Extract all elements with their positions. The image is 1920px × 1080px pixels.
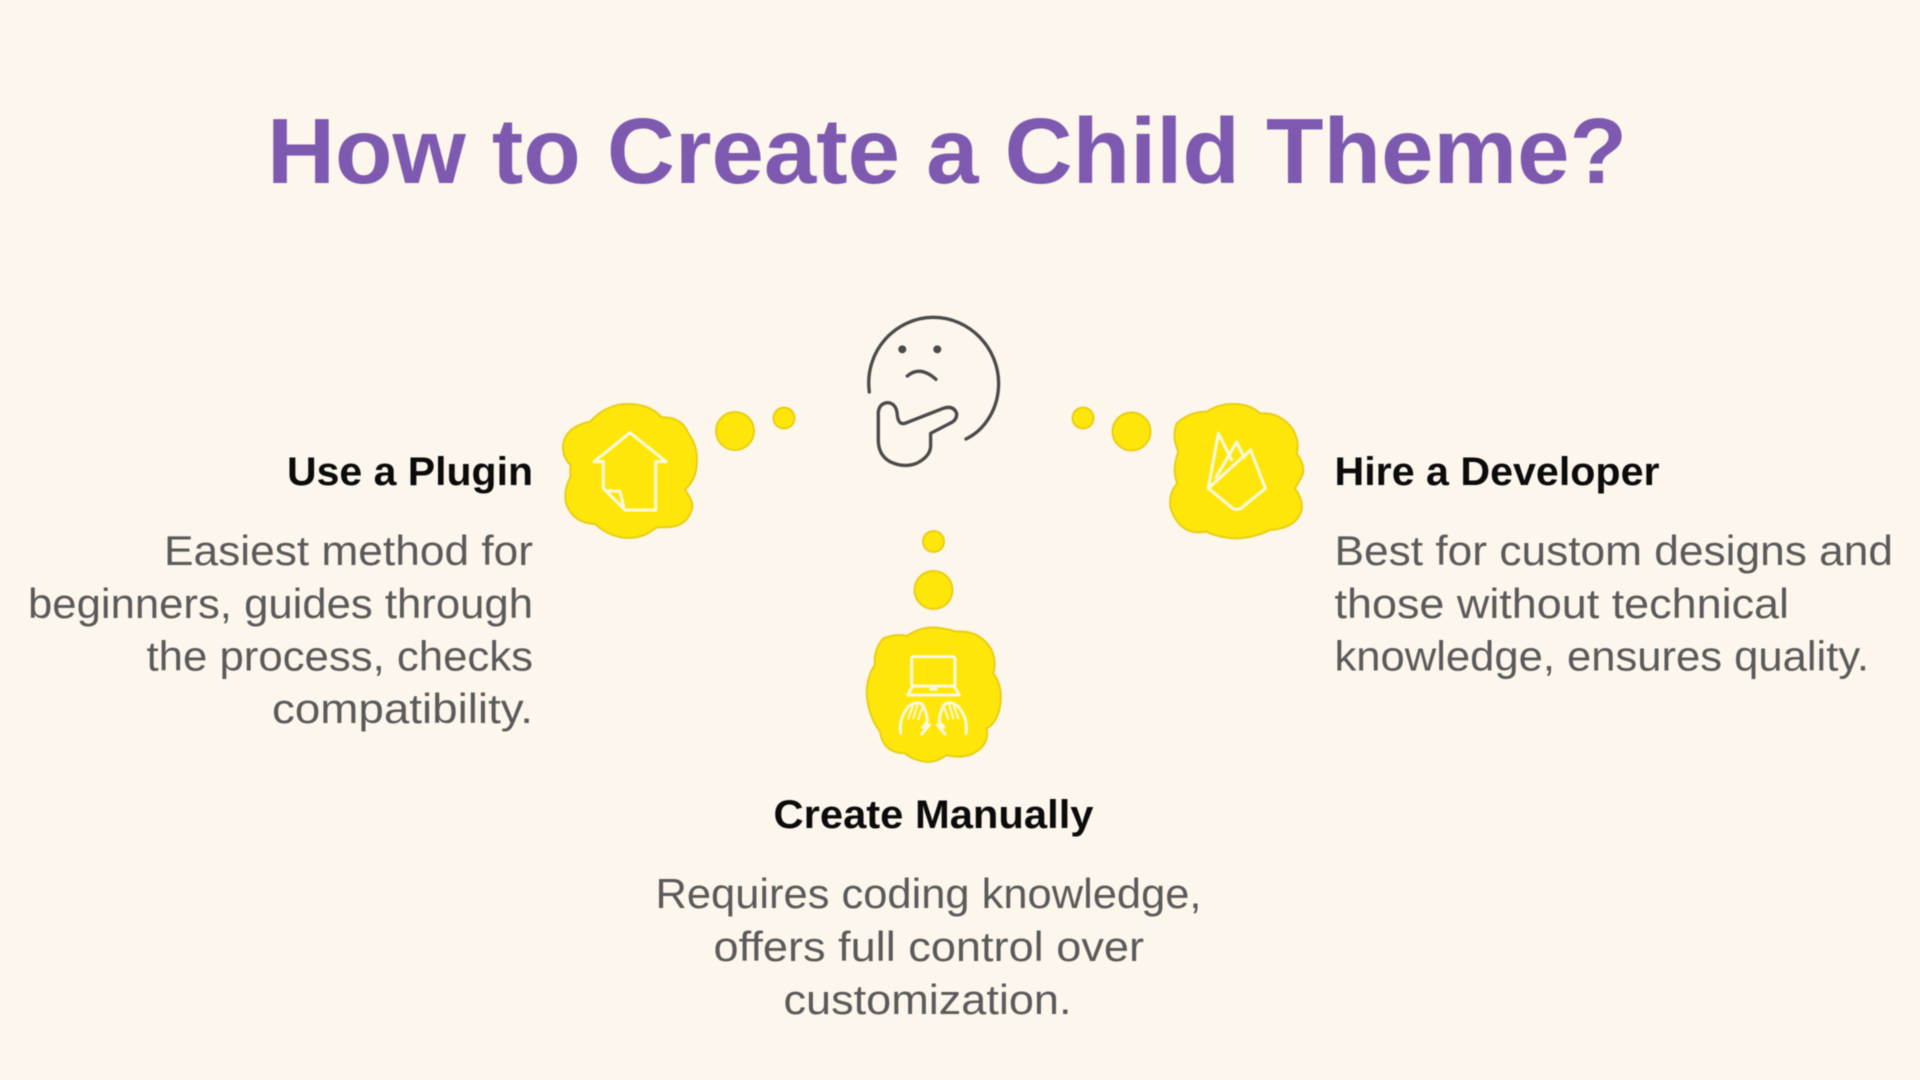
icon: firebase on yellow blob	[1170, 404, 1303, 538]
text: developer description: those without technical	[1334, 580, 1789, 627]
icon: thinking face	[869, 317, 999, 465]
text: plugin description: compatibility.	[272, 685, 533, 732]
text: plugin description: the process, checks	[146, 632, 533, 680]
text: developer description: Best for custom designs and	[1334, 527, 1893, 574]
heading: create manually: Create Manually	[774, 793, 1094, 837]
panel: hire a developer	[1072, 404, 1893, 680]
text: manual description: offers full control over	[714, 923, 1144, 970]
title: How to Create a Child Theme?	[267, 99, 1627, 203]
connector dots: manual	[914, 531, 952, 609]
icon: laptop and hands on yellow blob	[867, 627, 1001, 762]
text: plugin description: beginners, guides through	[28, 580, 533, 627]
text: developer description	[1334, 527, 1893, 680]
text: plugin description: Easiest method for	[164, 527, 533, 574]
icon: plugin house on yellow blob	[563, 404, 697, 538]
text: manual description: Requires coding knowledge,	[656, 870, 1202, 917]
connector dots: plugin	[716, 408, 794, 450]
text: plugin description	[28, 527, 533, 732]
heading: hire a developer: Hire a Developer	[1334, 450, 1660, 494]
panel: use a plugin	[28, 404, 794, 732]
heading: use a plugin: Use a Plugin	[287, 450, 533, 494]
text: developer description: knowledge, ensures quality.	[1334, 632, 1869, 680]
panel: create manually	[656, 531, 1202, 1023]
text: manual description	[656, 870, 1202, 1023]
text: manual description: customization.	[784, 976, 1072, 1023]
connector dots: developer	[1072, 408, 1150, 450]
